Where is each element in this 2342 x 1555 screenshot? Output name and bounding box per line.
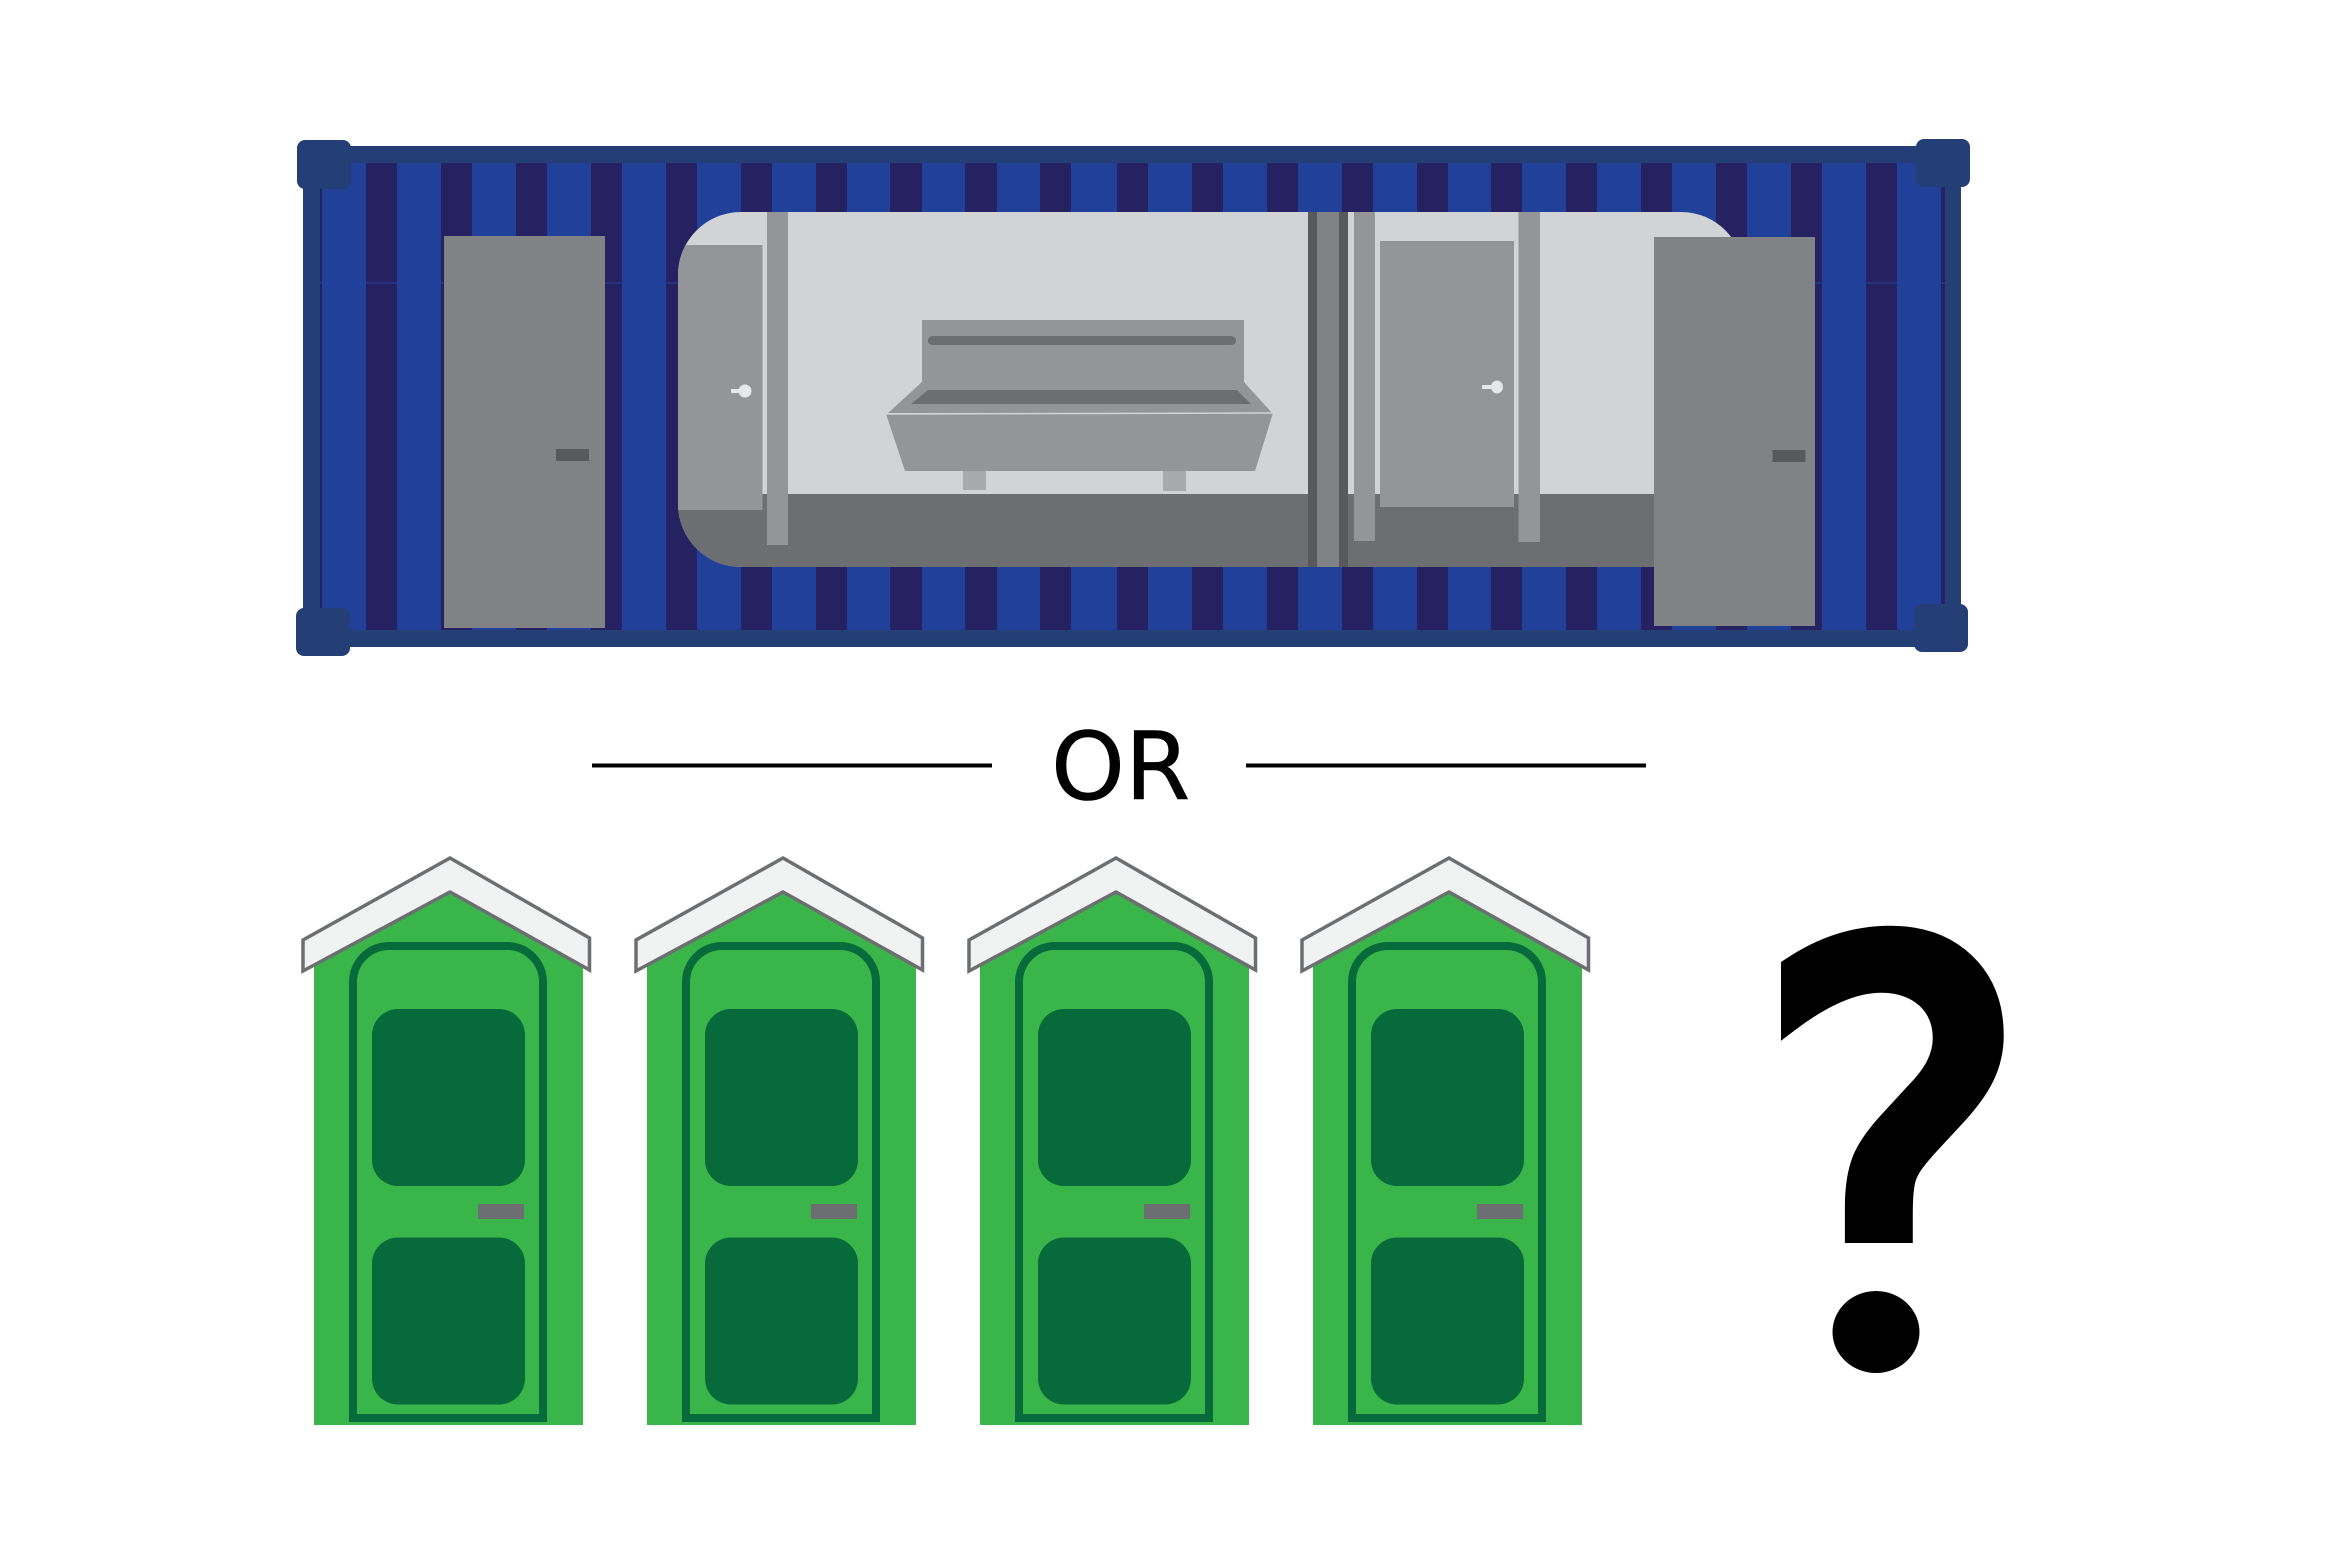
right divider line	[1246, 764, 1646, 768]
infographic canvas	[296, 139, 2004, 1425]
left divider line	[592, 764, 992, 768]
door latch	[811, 1204, 857, 1219]
lower panel	[372, 1238, 525, 1404]
roof	[1302, 858, 1588, 971]
left stall door	[678, 245, 762, 510]
door frame	[1352, 946, 1542, 1418]
trough sink	[886, 320, 1273, 491]
roof	[969, 858, 1256, 971]
portable toilet 4	[1302, 858, 1588, 1425]
upper panel	[1038, 1009, 1191, 1186]
interior cutaway view	[678, 212, 1744, 567]
upper panel	[372, 1009, 525, 1186]
roof	[636, 858, 922, 971]
OR label: OR	[1051, 713, 1190, 822]
floor	[678, 494, 1744, 567]
container corrugated wall	[318, 160, 1948, 634]
corner castings	[296, 139, 1970, 656]
roof	[303, 858, 590, 971]
door frame	[353, 946, 543, 1418]
left exterior door	[444, 236, 605, 628]
upper panel	[705, 1009, 858, 1186]
question mark	[1781, 926, 2004, 1373]
right stall door	[1380, 241, 1514, 507]
portable toilet 1	[303, 858, 590, 1425]
question mark: ?	[1753, 830, 2031, 1499]
door frame	[1019, 946, 1209, 1418]
lower panel	[705, 1238, 858, 1404]
lower panel	[1371, 1238, 1524, 1404]
back wall	[678, 212, 1744, 567]
right stall pillars	[1354, 212, 1540, 542]
right exterior door	[1654, 237, 1815, 626]
portable toilet 2	[636, 858, 922, 1425]
portable toilet 3	[969, 858, 1256, 1425]
left stall pillar	[767, 212, 788, 545]
upper panel	[1371, 1009, 1524, 1186]
lower panel	[1038, 1238, 1191, 1404]
door frame	[686, 946, 876, 1418]
container frame	[303, 146, 1961, 647]
door latch	[478, 1204, 524, 1219]
centre column	[1308, 212, 1348, 567]
door latch	[1477, 1204, 1523, 1219]
shipping container restroom	[296, 139, 1970, 656]
door latch	[1144, 1204, 1190, 1219]
